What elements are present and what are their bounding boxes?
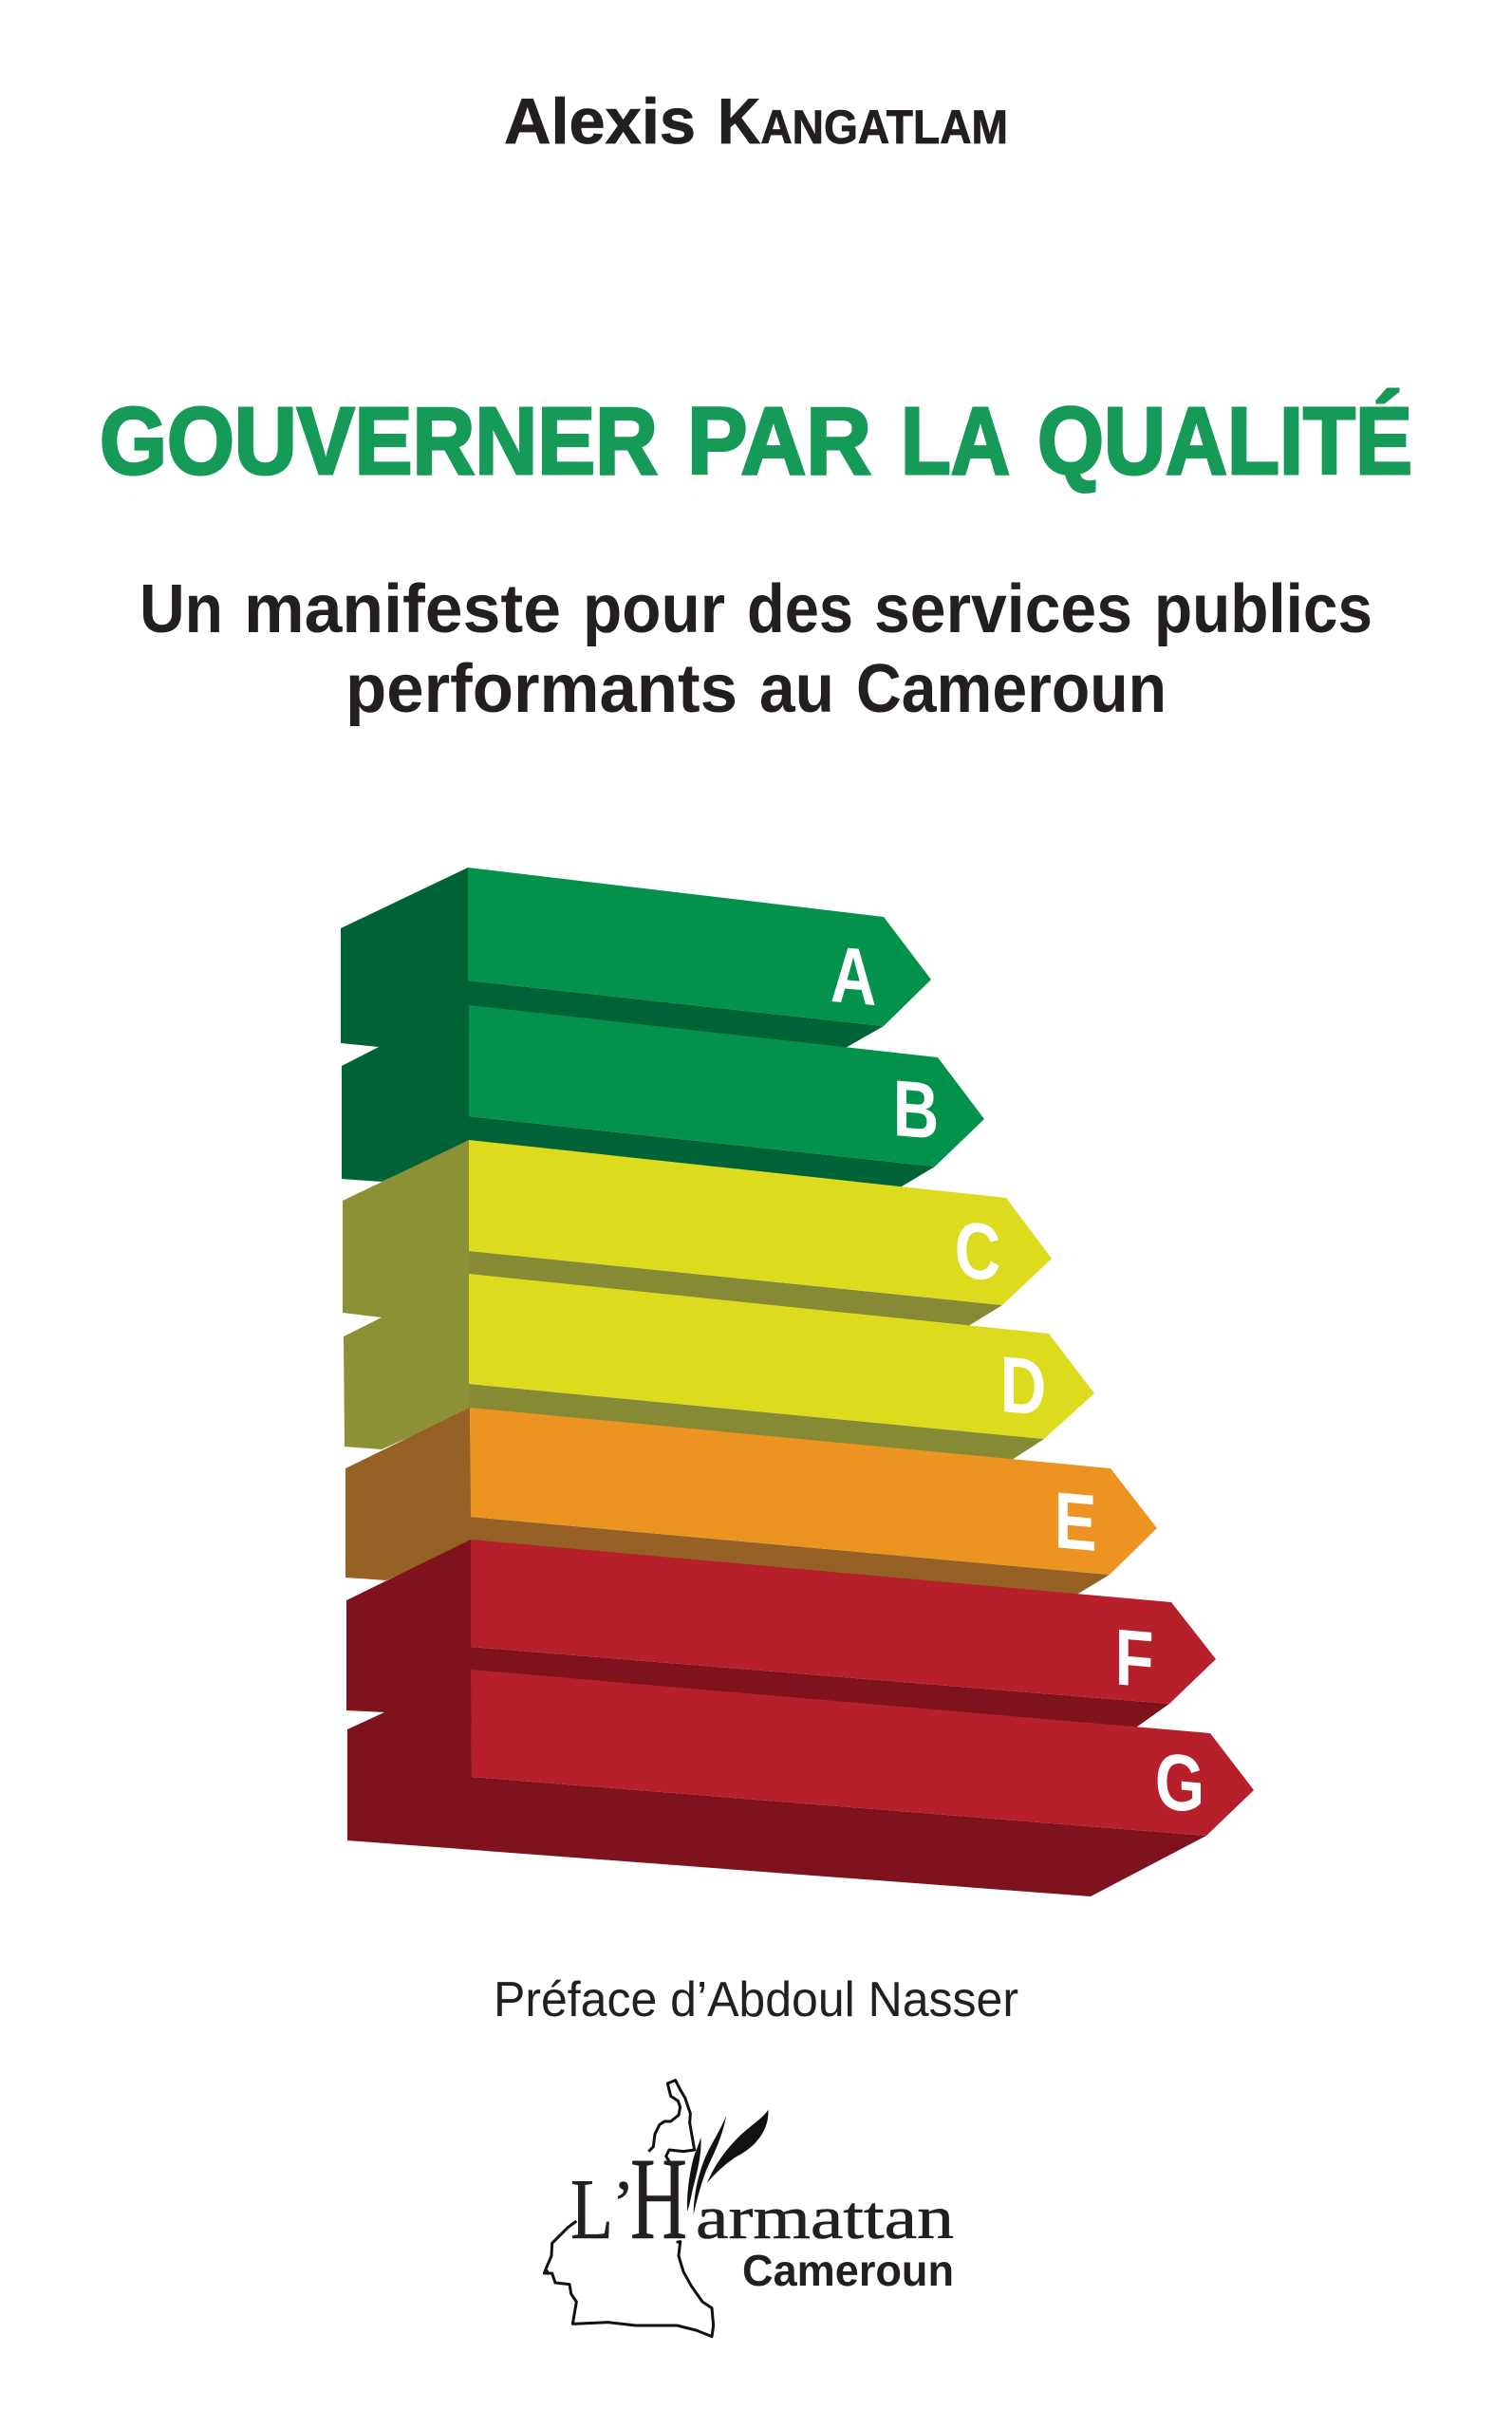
energy rating bar chart xyxy=(341,868,1254,1896)
author name: Alexis xyxy=(504,85,696,158)
bar C: C xyxy=(955,1205,1000,1298)
subtitle: performants xyxy=(345,651,737,727)
bar B xyxy=(469,1005,984,1189)
logo wordmark xyxy=(570,2134,954,2264)
icon: feathers xyxy=(687,2110,768,2214)
bar B: B xyxy=(893,1064,939,1157)
subtitle: publics xyxy=(1154,571,1372,647)
title: LA xyxy=(901,388,1010,495)
title xyxy=(100,388,1412,495)
title: PAR xyxy=(687,388,871,495)
bar C xyxy=(343,1140,1052,1449)
title: QUALITÉ xyxy=(1037,388,1412,495)
bar D: D xyxy=(1000,1340,1046,1433)
subtitle: services xyxy=(874,571,1132,647)
subtitle: Cameroun xyxy=(856,651,1167,727)
subtitle: Un xyxy=(140,571,223,647)
logo wordmark: ’ xyxy=(612,2168,634,2241)
bar A: A xyxy=(831,930,876,1023)
bar E xyxy=(345,1408,1157,1597)
publisher logo xyxy=(544,2081,954,2337)
logo wordmark: H xyxy=(630,2134,687,2264)
bar G xyxy=(347,1670,1254,1896)
bar D xyxy=(469,1274,1094,1462)
subtitle: pour xyxy=(583,571,725,647)
bar F xyxy=(346,1540,1216,1840)
title: GOUVERNER xyxy=(100,388,658,495)
subtitle xyxy=(140,571,1372,727)
subtitle: manifeste xyxy=(244,571,561,647)
author name: KANGATLAM xyxy=(718,85,1008,158)
logo wordmark: armattan xyxy=(696,2184,954,2252)
subtitle: des xyxy=(747,571,853,647)
subtitle: au xyxy=(759,651,834,727)
logo wordmark: L xyxy=(570,2161,613,2257)
logo subline: Cameroun xyxy=(742,2246,954,2295)
preface: Préface d’Abdoul Nasser xyxy=(494,1972,1018,2027)
bar G: G xyxy=(1155,1737,1204,1830)
icon: map of Cameroon outline xyxy=(544,2081,714,2337)
author name xyxy=(504,85,1008,158)
bar E: E xyxy=(1055,1476,1096,1569)
bar A xyxy=(341,868,931,1182)
bar F: F xyxy=(1114,1613,1154,1706)
